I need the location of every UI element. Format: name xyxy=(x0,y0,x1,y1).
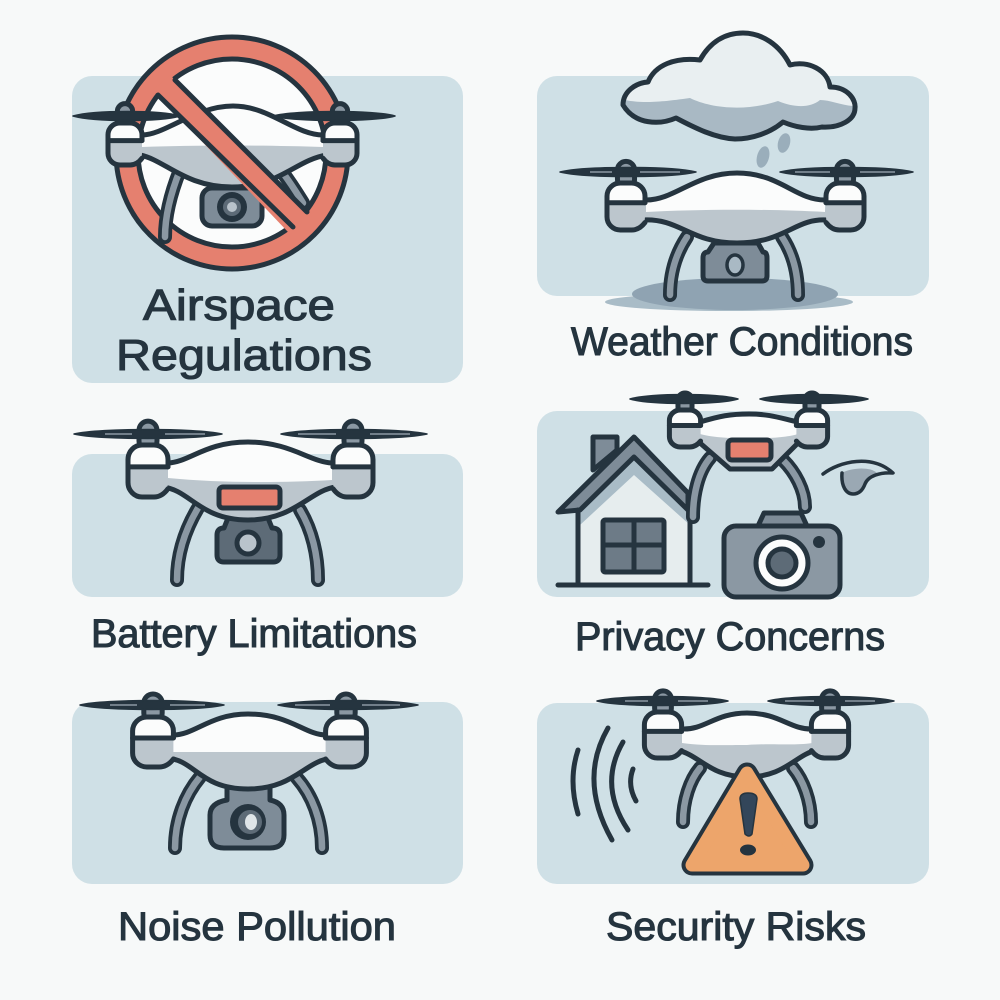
icon: warning triangle xyxy=(692,773,803,865)
panel: weather conditions xyxy=(537,33,929,364)
icon: rain drops xyxy=(754,132,792,169)
heading: Security Risks xyxy=(606,905,866,949)
icon: drone xyxy=(560,161,913,295)
heading: Airspace xyxy=(143,281,335,330)
icon: camera xyxy=(724,513,840,597)
panel background xyxy=(72,454,463,597)
panel: security risks xyxy=(537,691,929,949)
panel: airspace regulations xyxy=(72,37,463,383)
panel background xyxy=(537,76,929,296)
icon: drone xyxy=(80,694,418,848)
icon: sound waves xyxy=(573,728,636,840)
heading: Weather Conditions xyxy=(571,320,913,364)
panel: noise pollution xyxy=(72,694,463,949)
panel background xyxy=(537,703,929,884)
panel background xyxy=(537,411,929,597)
icon: drone xyxy=(597,691,894,822)
panel: privacy concerns xyxy=(537,393,929,659)
heading: Battery Limitations xyxy=(91,612,417,656)
heading: Privacy Concerns xyxy=(575,615,885,659)
ground shadow xyxy=(605,278,853,311)
panel background xyxy=(72,76,463,383)
icon: drone with red panel xyxy=(630,393,868,517)
heading: Noise Pollution xyxy=(118,905,396,949)
icon: prohibition sign with drone xyxy=(73,37,395,269)
icon: drone with battery xyxy=(74,421,427,580)
heading: Regulations xyxy=(116,331,372,380)
heading xyxy=(116,281,372,380)
icon: house xyxy=(558,437,708,585)
panel background xyxy=(72,702,463,884)
panel: battery limitations xyxy=(72,421,463,656)
icon: storm cloud xyxy=(623,33,855,139)
icon: eye shape xyxy=(823,461,893,494)
